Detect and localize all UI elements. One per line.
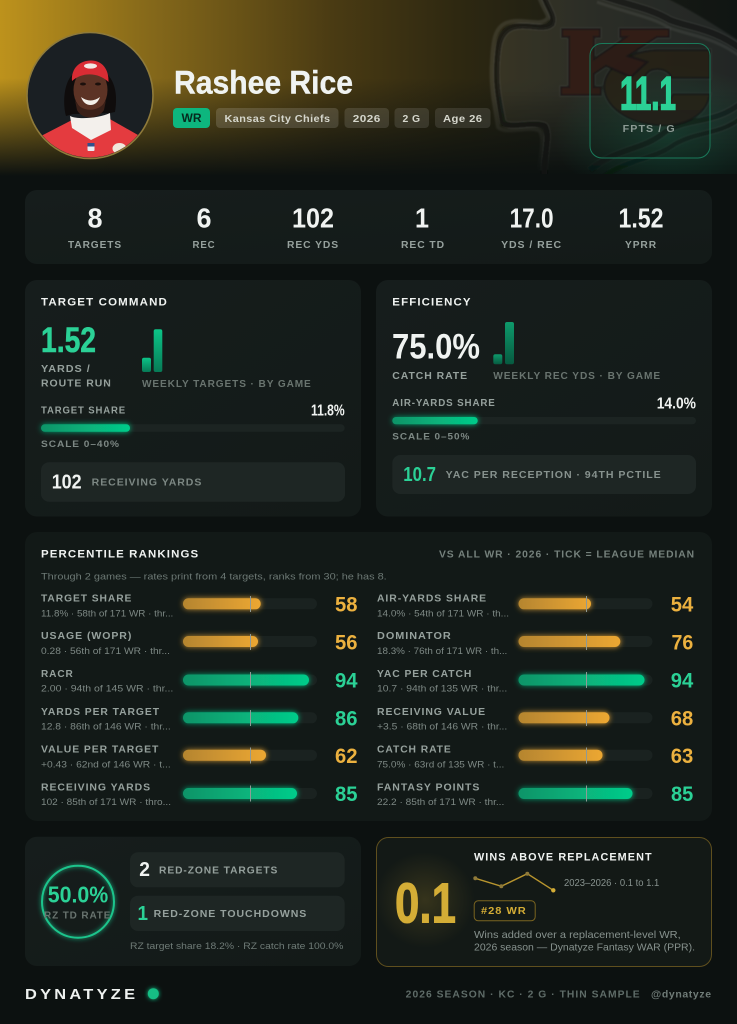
position and team chips: 2026: [353, 113, 381, 125]
row: target share: [41, 594, 358, 620]
row: value per target: VALUE PER TARGET: [41, 745, 159, 756]
panel: percentile rankings: [25, 532, 712, 821]
row: usage: 56: [335, 632, 358, 654]
row: dominator: DOMINATOR: [377, 631, 452, 642]
row: catch rate: 63: [671, 745, 693, 768]
row: usage: USAGE (WOPR): [41, 631, 132, 642]
position and team chips: 2 G: [402, 113, 420, 125]
row: yac per catch: [377, 669, 694, 695]
row: usage: [41, 631, 358, 657]
bar chart: weekly receiving yards: [493, 322, 661, 382]
row: catch rate: [377, 745, 693, 770]
meter: target share: 11.8%: [311, 403, 345, 420]
gauge: red-zone touchdown rate: [42, 866, 114, 938]
row: air-yards share: [377, 594, 694, 620]
big stat: catch rate: [392, 328, 480, 382]
legend note: VS ALL WR · 2026 · TICK = LEAGUE MEDIAN: [439, 550, 695, 561]
position and team chips: Age 26: [443, 113, 482, 125]
stat: yards per reception: [501, 203, 562, 251]
row: value per target: [41, 745, 358, 770]
meter: air-yards share: SCALE 0–50%: [392, 432, 470, 443]
big stat: yards per route run: 1.52: [41, 321, 96, 360]
player headshot: [27, 32, 153, 170]
row: yards per target: 86: [335, 708, 358, 730]
heading: wins above replacement: WINS ABOVE REPLACEMENT: [474, 852, 653, 864]
description: Wins added over a replacement-level WR,: [474, 929, 681, 941]
gauge: red-zone touchdown rate: RZ TD RATE: [44, 910, 111, 921]
fantasy points per game card: FPTS / G: [623, 124, 676, 135]
stat: yards per route run: [618, 203, 664, 251]
row: dominator: [377, 631, 693, 657]
row: target share: 58: [335, 594, 358, 617]
row: receiving value: 68: [671, 708, 694, 730]
icon: team arrowhead logo watermark: [490, 0, 737, 174]
row: catch rate: CATCH RATE: [377, 745, 452, 756]
row: yards per target: 12.8 · 86th of 146 WR · thr...: [41, 722, 171, 732]
icon: brand dot: [148, 988, 159, 999]
big stat: yards per route run: YARDS /: [41, 364, 91, 375]
stat: receiving yards: 102: [292, 203, 334, 234]
callout: yac per reception: 10.7: [403, 464, 436, 486]
badge: rank: #28 WR: [481, 905, 527, 917]
big stat: catch rate: 75.0%: [392, 328, 480, 367]
row: receiving value: RECEIVING VALUE: [377, 707, 486, 718]
stat: receiving touchdowns: 1: [415, 203, 429, 234]
callout: red-zone touchdowns: [130, 896, 345, 931]
callout: yac per reception: YAC PER RECEPTION · 94TH PCTILE: [446, 470, 662, 481]
row: yac per catch: 94: [671, 670, 694, 692]
row: receiving value: +3.5 · 68th of 146 WR · thr...: [377, 722, 507, 732]
callout: red-zone targets: [130, 852, 345, 887]
row: receiving yards: 102 · 85th of 171 WR · thro...: [41, 797, 171, 808]
bar chart: weekly receiving yards: WEEKLY REC YDS · BY GAME: [493, 371, 661, 382]
stat: yards per reception: YDS / REC: [501, 240, 562, 251]
brand wordmark: DYNATYZE: [25, 986, 138, 1003]
stat: targets: TARGETS: [68, 240, 122, 251]
big stat: war value: 0.1: [395, 872, 456, 936]
callout: receiving yards: [41, 462, 345, 502]
row: air-yards share: 54: [671, 594, 694, 617]
big stat: yards per route run: [41, 321, 112, 390]
callout: red-zone touchdowns: RED-ZONE TOUCHDOWNS: [154, 909, 307, 920]
row: air-yards share: 14.0% · 54th of 171 WR · th...: [377, 609, 509, 620]
panel: target command: [25, 280, 361, 516]
callout: red-zone touchdowns: 1: [138, 903, 148, 925]
callout: yac per reception: [392, 455, 696, 494]
row: racr: [41, 669, 358, 695]
row: usage: 0.28 · 56th of 171 WR · thr...: [41, 646, 170, 657]
stat: receptions: [192, 203, 216, 251]
meter: target share: [41, 403, 345, 450]
stat: yards per route run: YPRR: [625, 240, 657, 251]
sample note: Through 2 games — rates print from 4 targets, ranks from 30; he has 8.: [41, 572, 387, 583]
heading: percentile rankings: PERCENTILE RANKINGS: [41, 549, 199, 561]
fantasy points per game card: 11.1: [620, 66, 676, 120]
callout: receiving yards: RECEIVING YARDS: [92, 477, 202, 488]
stat: targets: 8: [88, 203, 102, 234]
header band: [0, 0, 737, 174]
fantasy points per game card: [590, 44, 710, 158]
row: yards per target: [41, 707, 358, 732]
row: receiving yards: RECEIVING YARDS: [41, 783, 151, 794]
callout: red-zone targets: RED-ZONE TARGETS: [159, 865, 278, 876]
row: yac per catch: YAC PER CATCH: [377, 669, 472, 680]
footer note: 2026 SEASON · KC · 2 G · THIN SAMPLE: [406, 990, 641, 1001]
row: value per target: 62: [335, 745, 358, 768]
callout: receiving yards: 102: [52, 471, 82, 493]
row: dominator: 18.3% · 76th of 171 WR · th...: [377, 646, 507, 657]
meter: target share: SCALE 0–40%: [41, 439, 120, 450]
player name: Rashee Rice: [174, 64, 353, 100]
panel: efficiency: [376, 280, 712, 516]
panel: season totals strip: [25, 190, 712, 264]
row: target share: 11.8% · 58th of 171 WR · thr...: [41, 609, 173, 620]
gauge: red-zone touchdown rate: 50.0%: [48, 882, 108, 908]
row: yards per target: YARDS PER TARGET: [41, 707, 160, 718]
row: receiving yards: [41, 783, 358, 808]
row: fantasy points: [377, 783, 694, 808]
heading: target command: TARGET COMMAND: [41, 296, 168, 308]
panel: red zone: [25, 837, 361, 966]
row: receiving value: [377, 707, 694, 732]
big stat: yards per route run: ROUTE RUN: [41, 379, 112, 390]
row: dominator: 76: [672, 632, 693, 654]
heading: efficiency: EFFICIENCY: [392, 296, 472, 308]
row: value per target: +0.43 · 62nd of 146 WR · t...: [41, 759, 171, 770]
meter: air-yards share: 14.0%: [657, 395, 696, 412]
stat: receiving touchdowns: [401, 203, 445, 251]
stat: receptions: 6: [196, 203, 212, 234]
row: fantasy points: 85: [671, 783, 694, 806]
footer: [25, 986, 712, 1003]
meter: air-yards share: [392, 395, 696, 443]
panel: wins above replacement: [375, 838, 712, 966]
stat: yards per reception: 17.0: [510, 203, 554, 234]
row: racr: 94: [335, 670, 358, 692]
meter: target share: TARGET SHARE: [41, 405, 126, 416]
row: air-yards share: AIR-YARDS SHARE: [377, 594, 487, 605]
sparkline: war by season: [473, 872, 556, 892]
footer handle: @dynatyze: [651, 990, 712, 1001]
bar chart: weekly targets: [142, 329, 312, 390]
description: [474, 929, 695, 954]
row: fantasy points: 22.2 · 85th of 171 WR · thr...: [377, 797, 504, 808]
red-zone footnote: RZ target share 18.2% · RZ catch rate 100.0%: [130, 941, 344, 952]
stat: receptions: REC: [192, 240, 216, 251]
stat: receiving touchdowns: REC TD: [401, 240, 445, 251]
callout: red-zone targets: 2: [139, 859, 150, 881]
stat: receiving yards: REC YDS: [287, 240, 339, 251]
badge: rank: [474, 901, 535, 921]
bar chart: weekly targets: WEEKLY TARGETS · BY GAME: [142, 379, 312, 390]
stat: targets: [68, 203, 122, 251]
stat: yards per route run: 1.52: [618, 203, 664, 234]
position and team chips: WR: [182, 113, 202, 125]
row: target share: TARGET SHARE: [41, 594, 132, 605]
row: racr: RACR: [41, 669, 74, 680]
row: racr: 2.00 · 94th of 145 WR · thr...: [41, 684, 173, 695]
meter: air-yards share: AIR-YARDS SHARE: [392, 398, 496, 409]
row: catch rate: 75.0% · 63rd of 135 WR · t...: [377, 759, 504, 770]
big stat: catch rate: CATCH RATE: [392, 371, 468, 382]
row: yac per catch: 10.7 · 94th of 135 WR · thr...: [377, 684, 507, 695]
sparkline range label: 2023–2026 · 0.1 to 1.1: [564, 878, 660, 889]
description: 2026 season — Dynatyze Fantasy WAR (PPR).: [474, 942, 695, 954]
position and team chips: Kansas City Chiefs: [224, 113, 330, 125]
position and team chips: [173, 108, 490, 128]
row: fantasy points: FANTASY POINTS: [377, 783, 480, 794]
stat: receiving yards: [287, 203, 339, 251]
row: receiving yards: 85: [335, 783, 358, 806]
